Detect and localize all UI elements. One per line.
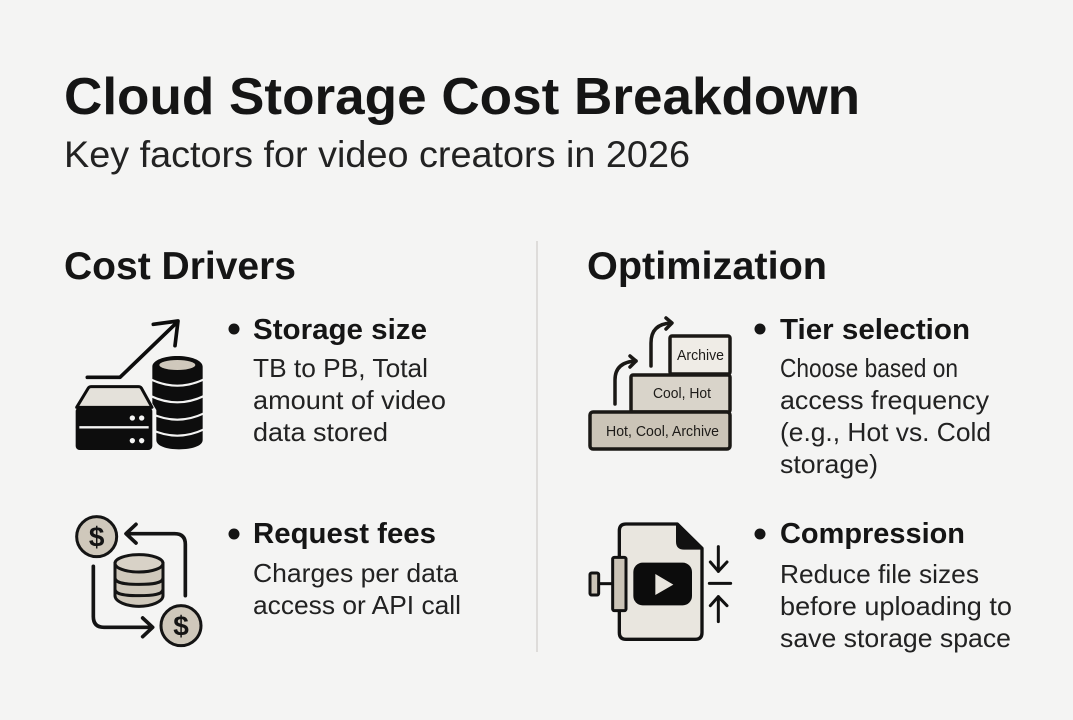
panel: optimization	[587, 245, 1012, 653]
item: request fees: Charges per data	[253, 558, 459, 588]
icon: storage tier steps: Cool, Hot	[653, 386, 711, 402]
icon: storage tier steps	[590, 318, 730, 449]
item: tier selection: access frequency	[780, 385, 989, 415]
heading: optimization: Optimization	[587, 245, 827, 288]
item: compression	[754, 518, 1012, 653]
heading: cost drivers: Cost Drivers	[64, 245, 296, 288]
item: storage size: data stored	[253, 417, 388, 447]
icon: storage tier steps: Archive	[677, 348, 724, 364]
item: storage size: amount of video	[253, 385, 446, 415]
subtitle: Key factors for video creators in 2026	[64, 134, 690, 175]
item: request fees	[228, 518, 461, 620]
icon: storage growth	[76, 321, 204, 450]
item: compression: before uploading to	[780, 591, 1012, 621]
panel: cost drivers	[64, 245, 461, 646]
icon: request fees cycle	[77, 517, 201, 646]
item: tier selection: Tier selection	[780, 314, 970, 346]
item: tier selection	[754, 314, 991, 479]
item: compression: Compression	[780, 518, 965, 550]
item: storage size	[228, 314, 446, 447]
icon: storage tier steps: Hot, Cool, Archive	[606, 424, 719, 440]
item: compression: Reduce file sizes	[780, 559, 979, 589]
item: tier selection: Choose based on	[780, 353, 958, 383]
item: storage size: TB to PB, Total	[253, 353, 428, 383]
item: tier selection: storage)	[780, 449, 878, 479]
item: storage size: Storage size	[253, 314, 427, 346]
icon: request fees cycle: $	[173, 610, 189, 641]
item: request fees: Request fees	[253, 518, 436, 550]
title: Cloud Storage Cost Breakdown	[64, 68, 860, 126]
item: tier selection: (e.g., Hot vs. Cold	[780, 417, 991, 447]
icon: video compression	[590, 524, 731, 639]
item: compression: save storage space	[780, 623, 1011, 653]
item: request fees: access or API call	[253, 590, 461, 620]
icon: request fees cycle: $	[89, 521, 105, 552]
